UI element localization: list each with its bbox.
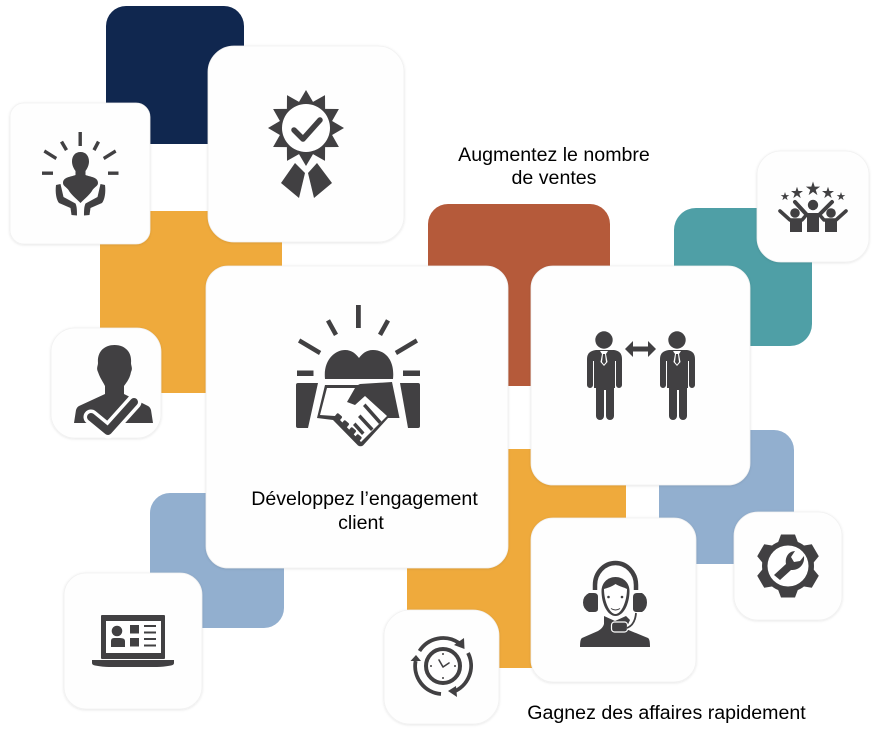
panel: user card	[51, 328, 161, 438]
icon: clock with cycle arrows	[410, 638, 471, 697]
panel: gear card	[734, 512, 842, 620]
panel: laptop card	[64, 573, 202, 709]
text: client: client	[338, 512, 384, 534]
panel: central engagement card	[206, 266, 508, 568]
panel: headset agent card	[531, 518, 696, 682]
panel: stars team card	[757, 151, 869, 262]
text: develop engagement: Développez l’engagement	[251, 488, 478, 510]
block: rust	[428, 204, 610, 386]
icon: support agent	[580, 563, 650, 647]
icon: person in hands	[42, 132, 118, 216]
panel: clock card	[384, 610, 499, 724]
block: navy	[106, 6, 244, 144]
icon: laptop	[92, 615, 174, 667]
panel: hands card	[10, 103, 150, 244]
icon: award badge	[268, 90, 344, 198]
panel: badge card	[208, 46, 404, 242]
icon: gear and wrench	[756, 534, 820, 598]
icon: handshake with heart	[296, 305, 420, 446]
icon: cheering team with stars	[780, 182, 846, 232]
icon: user with check	[74, 345, 153, 431]
block: teal	[674, 208, 812, 346]
icon: two businessmen with arrow	[587, 331, 695, 420]
block: orange left	[100, 211, 282, 393]
block: blue left	[150, 493, 284, 628]
block: orange bottom	[407, 449, 626, 668]
heading: win business fast: Gagnez des affaires rapidement	[527, 702, 806, 724]
heading: increase sales second line: de ventes	[512, 167, 597, 189]
panel: two persons card	[531, 266, 750, 485]
block: blue right	[659, 430, 794, 564]
heading: increase sales: Augmentez le nombre	[458, 144, 650, 166]
